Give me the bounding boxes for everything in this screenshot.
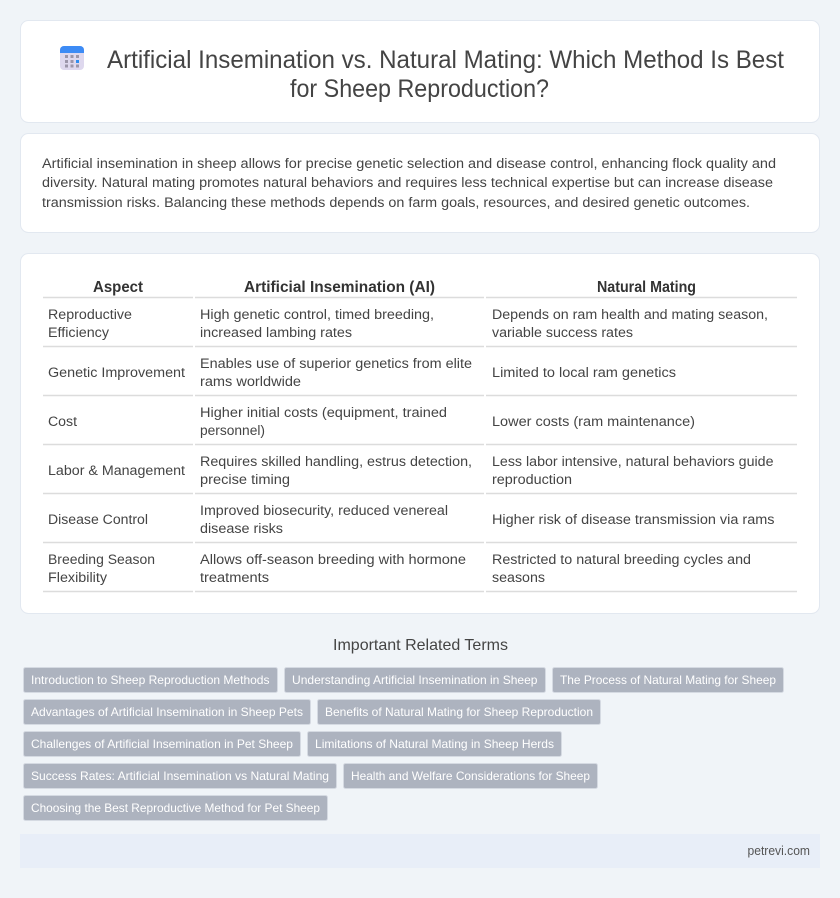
row: labor and management: Labor & Management [48, 463, 185, 479]
row: genetic improvement [48, 356, 676, 390]
tag [318, 700, 600, 724]
title: Artificial Insemination vs. Natural Mating: Which Method Is Best [107, 46, 784, 74]
row: cost: Higher initial costs (equipment, trained [200, 405, 447, 421]
row: breeding season flexibility: Breeding Season [48, 552, 155, 568]
panel: title header [20, 20, 820, 122]
row: reproductive efficiency: increased lambing rates [200, 325, 352, 341]
row: breeding season flexibility: Flexibility [48, 570, 108, 586]
tag [552, 668, 784, 692]
table header: Aspect [93, 279, 143, 296]
tag: Understanding Artificial Insemination in Sheep [292, 673, 538, 687]
related terms tags [24, 668, 784, 820]
tag: Health and Welfare Considerations for Sheep [351, 769, 590, 783]
row: labor and management: Requires skilled handling, estrus detection, [200, 454, 472, 470]
row: breeding season flexibility: seasons [492, 570, 545, 586]
tag: The Process of Natural Mating for Sheep [560, 673, 776, 687]
tag: Introduction to Sheep Reproduction Methods [31, 673, 270, 687]
tag [344, 764, 598, 788]
row: genetic improvement: Limited to local ram genetics [492, 365, 676, 381]
row: breeding season flexibility: Allows off-season breeding with hormone [200, 552, 466, 568]
tag: Limitations of Natural Mating in Sheep Herds [315, 737, 554, 751]
tag: Benefits of Natural Mating for Sheep Reproduction [325, 705, 593, 719]
row: labor and management: precise timing [200, 472, 290, 488]
row: reproductive efficiency: High genetic control, timed breeding, [200, 307, 434, 323]
introduction text: transmission risks. Balancing these methods depends on farm goals, resources, and desired genetic outcomes. [42, 195, 750, 211]
row: reproductive efficiency: variable success rates [492, 325, 633, 341]
tag [24, 668, 278, 692]
row: cost: Cost [48, 414, 77, 430]
row: genetic improvement: Genetic Improvement [48, 365, 185, 381]
tag: Success Rates: Artificial Insemination vs Natural Mating [31, 769, 329, 783]
title [107, 46, 784, 103]
table header [93, 279, 696, 296]
row: breeding season flexibility: Restricted to natural breeding cycles and [492, 552, 751, 568]
row: labor and management: Less labor intensive, natural behaviors guide [492, 454, 774, 470]
heading: important related terms: Important Related Terms [333, 637, 508, 654]
icon: calendar [60, 46, 84, 70]
introduction text: diversity. Natural mating promotes natural behaviors and requires less technical expertise but can increase disease [42, 175, 773, 191]
tag [24, 764, 336, 788]
panel: introduction [20, 134, 820, 232]
row: disease control: Higher risk of disease transmission via rams [492, 512, 774, 528]
row: reproductive efficiency: Reproductive [48, 307, 132, 323]
row: disease control: disease risks [200, 521, 283, 537]
introduction text [42, 156, 776, 211]
tag: Challenges of Artificial Insemination in Pet Sheep [31, 737, 293, 751]
row: labor and management: reproduction [492, 472, 572, 488]
table header: Artificial Insemination (AI) [244, 279, 435, 296]
row: reproductive efficiency: Depends on ram health and mating season, [492, 307, 768, 323]
row: labor and management [48, 454, 774, 488]
introduction text: Artificial insemination in sheep allows for precise genetic selection and disease control, enhancing flock quality and [42, 156, 776, 172]
tag [24, 732, 300, 756]
row: cost [48, 405, 695, 439]
row: cost: personnel) [200, 423, 265, 439]
row: genetic improvement: rams worldwide [200, 374, 301, 390]
tag: Choosing the Best Reproductive Method for Pet Sheep [31, 801, 320, 815]
footer site name: petrevi.com [748, 844, 810, 858]
table header: Natural Mating [597, 279, 696, 296]
row: disease control: Disease Control [48, 512, 148, 528]
tag [24, 700, 310, 724]
row: breeding season flexibility: treatments [200, 570, 269, 586]
panel: comparison table [20, 254, 820, 614]
tag [24, 796, 328, 820]
row: breeding season flexibility [48, 552, 751, 586]
row: genetic improvement: Enables use of superior genetics from elite [200, 356, 472, 372]
row: disease control [48, 503, 774, 537]
tag [308, 732, 562, 756]
tag [284, 668, 546, 692]
row: reproductive efficiency [48, 307, 768, 341]
tag: Advantages of Artificial Insemination in Sheep Pets [31, 705, 303, 719]
title: for Sheep Reproduction? [290, 75, 549, 103]
row: reproductive efficiency: Efficiency [48, 325, 110, 341]
footer [20, 834, 820, 868]
row: cost: Lower costs (ram maintenance) [492, 414, 695, 430]
row: disease control: Improved biosecurity, reduced venereal [200, 503, 448, 519]
